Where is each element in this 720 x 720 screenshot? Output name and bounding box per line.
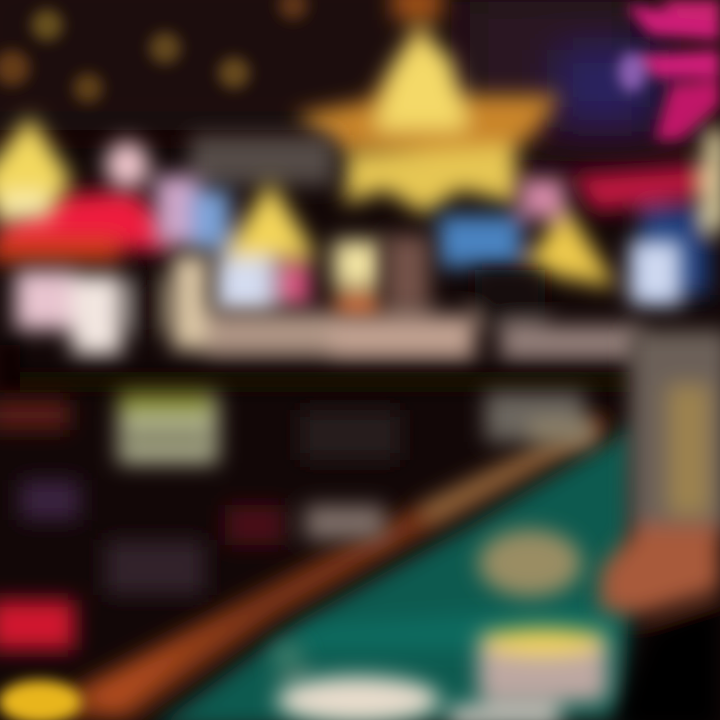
lower shelves (0, 392, 595, 650)
middle grey backdrop and red banners (0, 130, 720, 295)
central golden star (295, 0, 560, 215)
orange bar rail (70, 415, 610, 720)
right foreground figure (600, 330, 720, 720)
dark shelf line (0, 345, 630, 392)
green bar counter (150, 425, 635, 720)
left yellow lantern (0, 115, 72, 225)
coloured flags row (105, 141, 682, 320)
yellow corner blob (0, 680, 82, 720)
upper wall (0, 0, 720, 160)
gold dots (0, 0, 308, 103)
magenta firework (618, 0, 720, 140)
bowls on counter (272, 529, 608, 720)
bottles and white row (15, 235, 640, 360)
